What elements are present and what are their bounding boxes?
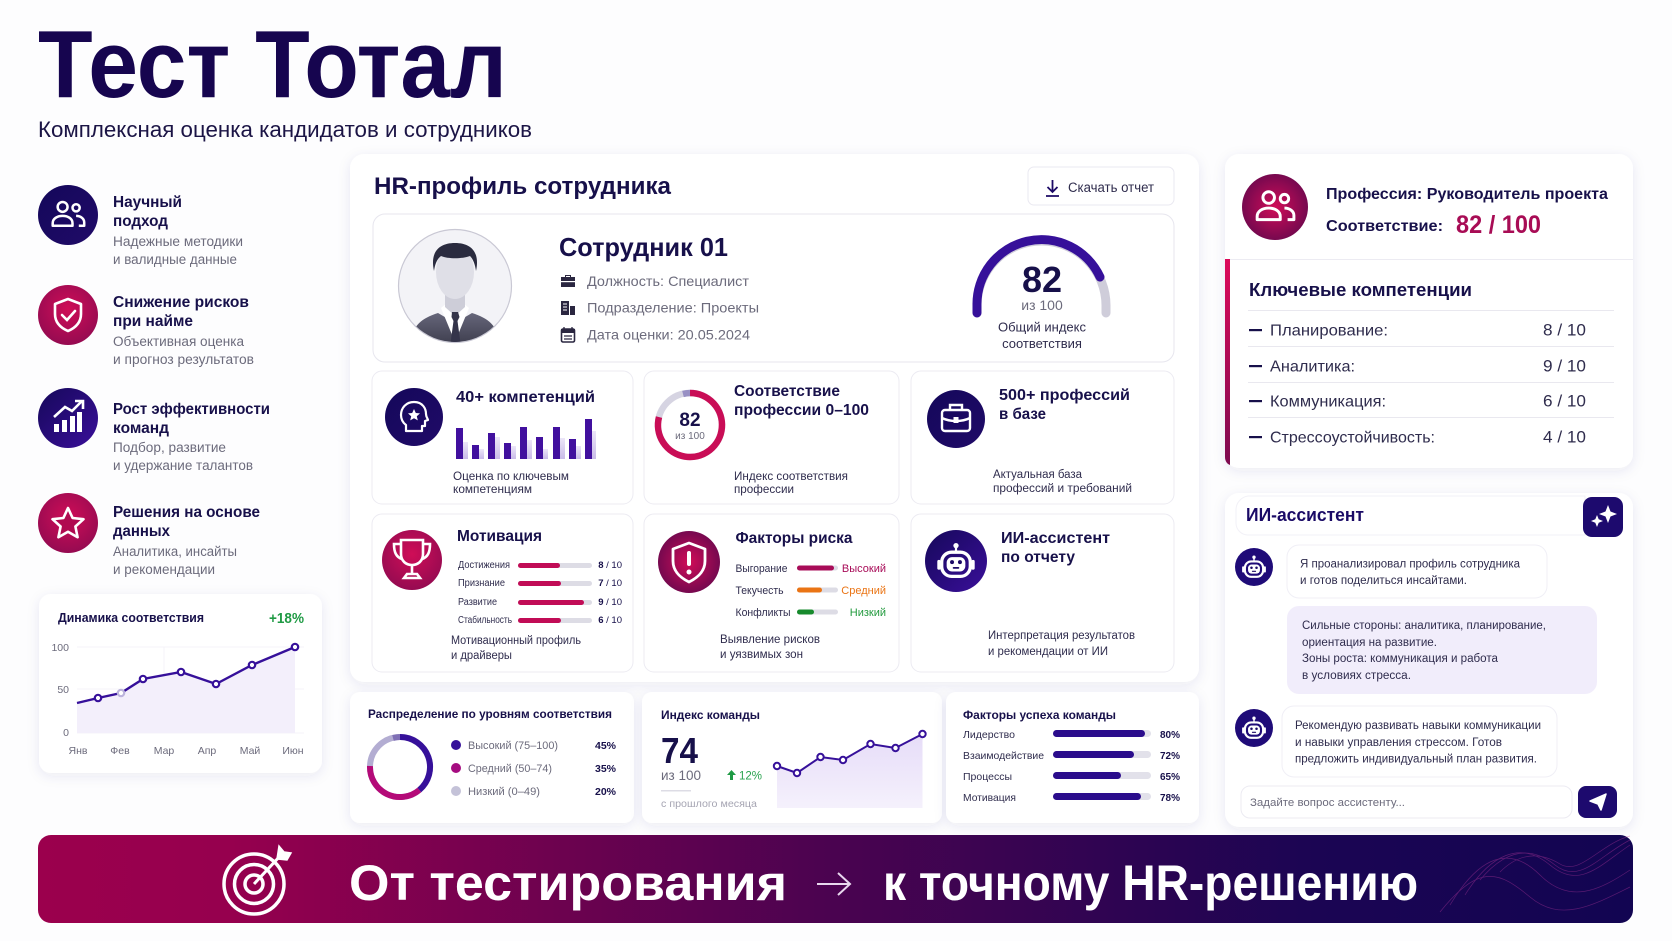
card: AI assistant for report <box>911 514 1174 672</box>
benefit: data-driven decisions <box>38 493 260 577</box>
input field <box>1241 786 1572 818</box>
gauge: overall index <box>977 240 1106 351</box>
line chart <box>774 731 926 808</box>
donut 82 of 100 <box>658 393 722 457</box>
icon: head with star <box>385 388 443 446</box>
benefit: reducing hiring risk: Снижение рисков <box>113 294 249 311</box>
benefit: scientific approach: и валидные данные <box>113 252 237 267</box>
panel: team success factors: Мотивация <box>963 792 1016 804</box>
download button: Скачать отчет <box>1068 180 1154 195</box>
bubble 3: предложить индивидуальный план развития. <box>1295 754 1537 766</box>
panel: AI assistant chat <box>1225 493 1633 827</box>
risk bars: Высокий <box>842 563 886 575</box>
card: 500+ professions <box>911 371 1174 504</box>
panel: team success factors: Лидерство <box>963 729 1015 741</box>
panel: team success factors: Факторы успеха команды <box>963 708 1116 722</box>
bubble 2 <box>1287 606 1597 694</box>
card: motivation <box>372 514 633 672</box>
bubble 2: Сильные стороны: аналитика, планирование, <box>1302 620 1546 632</box>
card: 40+ competencies: 40+ компетенций <box>456 389 595 406</box>
panel: compliance dynamics chart: Динамика соответствия <box>58 610 204 625</box>
icon: star <box>38 493 98 553</box>
avatar <box>398 230 512 346</box>
panel: team index: 74 <box>661 730 698 771</box>
motivation bars: Развитие <box>458 597 497 608</box>
download button <box>1028 167 1174 205</box>
panel: team success factors: 78% <box>1160 793 1180 804</box>
card: profession match: профессии <box>734 484 794 496</box>
title: Тест Тотал <box>38 11 507 118</box>
risk bars: Средний <box>841 585 886 597</box>
gauge: overall index: Общий индекс <box>998 320 1086 334</box>
panel: distribution by level <box>350 692 634 823</box>
risk bars: Низкий <box>850 607 886 619</box>
legend: 20% <box>595 786 617 798</box>
benefit: reducing hiring risk: Объективная оценка <box>113 334 244 349</box>
line chart: 100 <box>51 642 69 654</box>
benefit: reducing hiring risk: при найме <box>113 313 193 330</box>
heading: Ключевые компетенции <box>1249 279 1472 300</box>
competency rows: Коммуникация: <box>1270 394 1386 410</box>
bubble 2: Зоны роста: коммуникация и работа <box>1302 653 1499 665</box>
panel: team index: Индекс команды <box>661 708 760 722</box>
panel: team success factors: 72% <box>1160 751 1180 762</box>
card: profession match <box>644 371 899 504</box>
benefit: reducing hiring risk <box>38 285 254 367</box>
motivation bars: Достижения <box>458 560 510 571</box>
line chart <box>51 642 304 757</box>
change indicator: 12% <box>739 770 762 782</box>
donut 82 of 100: 82 <box>679 410 701 431</box>
panel: profession and key competencies: Соответствие: <box>1326 218 1443 235</box>
icon: target with arrow <box>224 846 291 914</box>
banner text right: к точному HR-решению <box>883 855 1418 911</box>
motivation bars: 6 / 10 <box>598 615 622 626</box>
bubble 3 <box>1282 706 1557 777</box>
benefit: data-driven decisions: данных <box>113 523 170 540</box>
legend <box>451 740 617 798</box>
panel: profession and key competencies: Профессия: Руководитель проекта <box>1326 186 1608 203</box>
panel: profession and key competencies <box>1225 154 1633 468</box>
legend: Низкий (0–49) <box>468 786 540 798</box>
motivation bars: Признание <box>458 578 505 589</box>
legend: Высокий (75–100) <box>468 740 558 752</box>
panel: compliance dynamics chart <box>39 594 322 773</box>
competency rows: 4 / 10 <box>1543 428 1586 446</box>
line chart: 0 <box>63 727 69 739</box>
card: 500+ professions: Актуальная база <box>993 469 1083 481</box>
card: 500+ professions: профессий и требований <box>993 483 1132 495</box>
donut chart <box>370 737 430 797</box>
panel: team success factors <box>946 692 1199 823</box>
benefit: team efficiency growth: Рост эффективности <box>113 401 270 418</box>
competency rows: 9 / 10 <box>1543 358 1586 376</box>
card: 40+ competencies: компетенциям <box>453 484 532 496</box>
card: motivation: Мотивация <box>457 528 542 545</box>
panel: team success factors: 65% <box>1160 772 1180 783</box>
icon: briefcase <box>927 390 985 448</box>
panel: compliance dynamics chart: +18% <box>269 611 304 627</box>
banner text left: От тестирования <box>349 855 787 911</box>
card: 500+ professions: в базе <box>999 406 1046 423</box>
arrow <box>817 873 850 895</box>
bubble 3: и навыки управления стрессом. Готов <box>1295 737 1502 749</box>
employee card <box>373 214 1174 362</box>
motivation bars <box>458 560 622 626</box>
competency rows: 8 / 10 <box>1543 322 1586 340</box>
card: risk factors: Факторы риска <box>736 530 853 547</box>
card: risk factors <box>644 514 899 672</box>
donut 82 of 100: из 100 <box>675 431 705 442</box>
bubble 3: Рекомендую развивать навыки коммуникации <box>1295 720 1541 732</box>
icon: people <box>38 185 98 245</box>
card: 40+ competencies <box>372 371 633 504</box>
line chart: Май <box>240 745 260 757</box>
card: risk factors: Выявление рисков <box>720 634 820 646</box>
benefit: scientific approach: Научный <box>113 194 182 211</box>
legend: 35% <box>595 763 617 775</box>
benefit: data-driven decisions: и рекомендации <box>113 562 215 577</box>
card: profession match: Соответствие <box>734 383 840 400</box>
gauge: overall index: из 100 <box>1021 297 1063 313</box>
competency rows: Стрессоустойчивость: <box>1270 430 1435 446</box>
send button <box>1578 786 1617 818</box>
line chart: Мар <box>154 745 174 757</box>
heading: ИИ-ассистент <box>1246 504 1364 525</box>
motivation bars: 9 / 10 <box>598 597 622 608</box>
benefit: team efficiency growth: команд <box>113 420 169 437</box>
card: 40+ competencies: Оценка по ключевым <box>453 471 569 483</box>
card: risk factors: и уязвимых зон <box>720 649 803 661</box>
input field: Задайте вопрос ассистенту... <box>1250 797 1405 809</box>
panel: team success factors: Взаимодействие <box>963 750 1044 762</box>
benefit: scientific approach: Надежные методики <box>113 234 243 249</box>
legend: 45% <box>595 740 617 752</box>
icon: trophy <box>382 530 442 590</box>
risk bars: Конфликты <box>736 607 791 619</box>
motivation bars: 8 / 10 <box>598 560 622 571</box>
accent bar <box>1225 259 1230 465</box>
card: motivation: Мотивационный профиль <box>451 635 581 647</box>
line chart: Фев <box>110 745 130 757</box>
competency rows: Аналитика: <box>1270 358 1355 376</box>
motivation bars: Стабильность <box>458 614 512 626</box>
robot avatar <box>1235 548 1273 586</box>
icon: alert shield <box>658 531 720 593</box>
gauge: overall index: 82 <box>1022 259 1062 300</box>
benefit: team efficiency growth <box>38 388 270 473</box>
card: motivation: и драйверы <box>451 650 512 662</box>
benefit: reducing hiring risk: и прогноз результатов <box>113 352 254 367</box>
panel: HR profile <box>350 154 1199 682</box>
panel: team index: из 100 <box>661 767 701 783</box>
icon: people <box>1242 174 1308 240</box>
bubble 2: в условиях стресса. <box>1302 670 1411 682</box>
card: profession match: Индекс соответствия <box>734 471 848 483</box>
card: AI assistant for report: по отчету <box>1001 549 1075 566</box>
panel: team success factors: 80% <box>1160 730 1180 741</box>
detail: position: Должность: Специалист <box>587 273 750 289</box>
benefit: team efficiency growth: Подбор, развитие <box>113 440 226 455</box>
change indicator <box>727 770 762 782</box>
robot avatar <box>1235 709 1273 747</box>
competency rows <box>1249 322 1586 446</box>
detail: date: Дата оценки: 20.05.2024 <box>587 326 750 342</box>
panel: distribution by level: Распределение по уровням соответствия <box>368 707 612 721</box>
employee name: Сотрудник 01 <box>559 232 728 262</box>
line chart: Апр <box>198 745 216 757</box>
benefit: data-driven decisions: Решения на основе <box>113 504 260 521</box>
risk bars <box>736 563 886 619</box>
subtitle: Комплексная оценка кандидатов и сотрудников <box>38 117 532 142</box>
panel: team index: с прошлого месяца <box>661 798 757 810</box>
bubble 1 <box>1287 545 1547 598</box>
bubble 1: Я проанализировал профиль сотрудника <box>1300 558 1521 570</box>
gauge: overall index: соответствия <box>1002 336 1082 351</box>
detail: department: Подразделение: Проекты <box>587 300 759 316</box>
sparkle button <box>1583 497 1623 537</box>
line chart: Июн <box>282 745 304 757</box>
panel: profession and key competencies: 82 / 100 <box>1456 211 1541 239</box>
competency rows: 6 / 10 <box>1543 392 1586 410</box>
panel: team success factors: Процессы <box>963 771 1012 783</box>
banner <box>38 835 1633 923</box>
competency rows: Планирование: <box>1270 322 1388 340</box>
card: 500+ professions: 500+ профессий <box>999 387 1130 404</box>
benefit: data-driven decisions: Аналитика, инсайты <box>113 544 237 559</box>
risk bars: Текучесть <box>736 585 784 597</box>
line chart: 50 <box>57 684 69 696</box>
risk bars: Выгорание <box>736 563 788 575</box>
benefit: scientific approach <box>38 185 243 267</box>
legend: Средний (50–74) <box>468 763 552 775</box>
icon: growth chart <box>38 388 98 448</box>
card: AI assistant for report: Интерпретация результатов <box>988 630 1135 642</box>
horizontal bars <box>1053 730 1151 800</box>
motivation bars: 7 / 10 <box>598 578 622 589</box>
card: profession match: профессии 0–100 <box>734 402 869 419</box>
benefit: scientific approach: подход <box>113 213 168 230</box>
line chart: Янв <box>69 745 88 757</box>
icon: shield check <box>38 285 98 345</box>
heading: HR-профиль сотрудника <box>374 173 671 200</box>
icon: robot <box>925 530 987 592</box>
card: AI assistant for report: ИИ-ассистент <box>1001 530 1110 547</box>
benefit: team efficiency growth: и удержание талантов <box>113 458 253 473</box>
bubble 1: и готов поделиться инсайтами. <box>1300 575 1467 587</box>
bubble 2: ориентация на развитие. <box>1302 637 1437 649</box>
bar chart <box>456 419 596 459</box>
card: AI assistant for report: и рекомендации от ИИ <box>988 646 1108 658</box>
panel: team index <box>642 692 942 823</box>
